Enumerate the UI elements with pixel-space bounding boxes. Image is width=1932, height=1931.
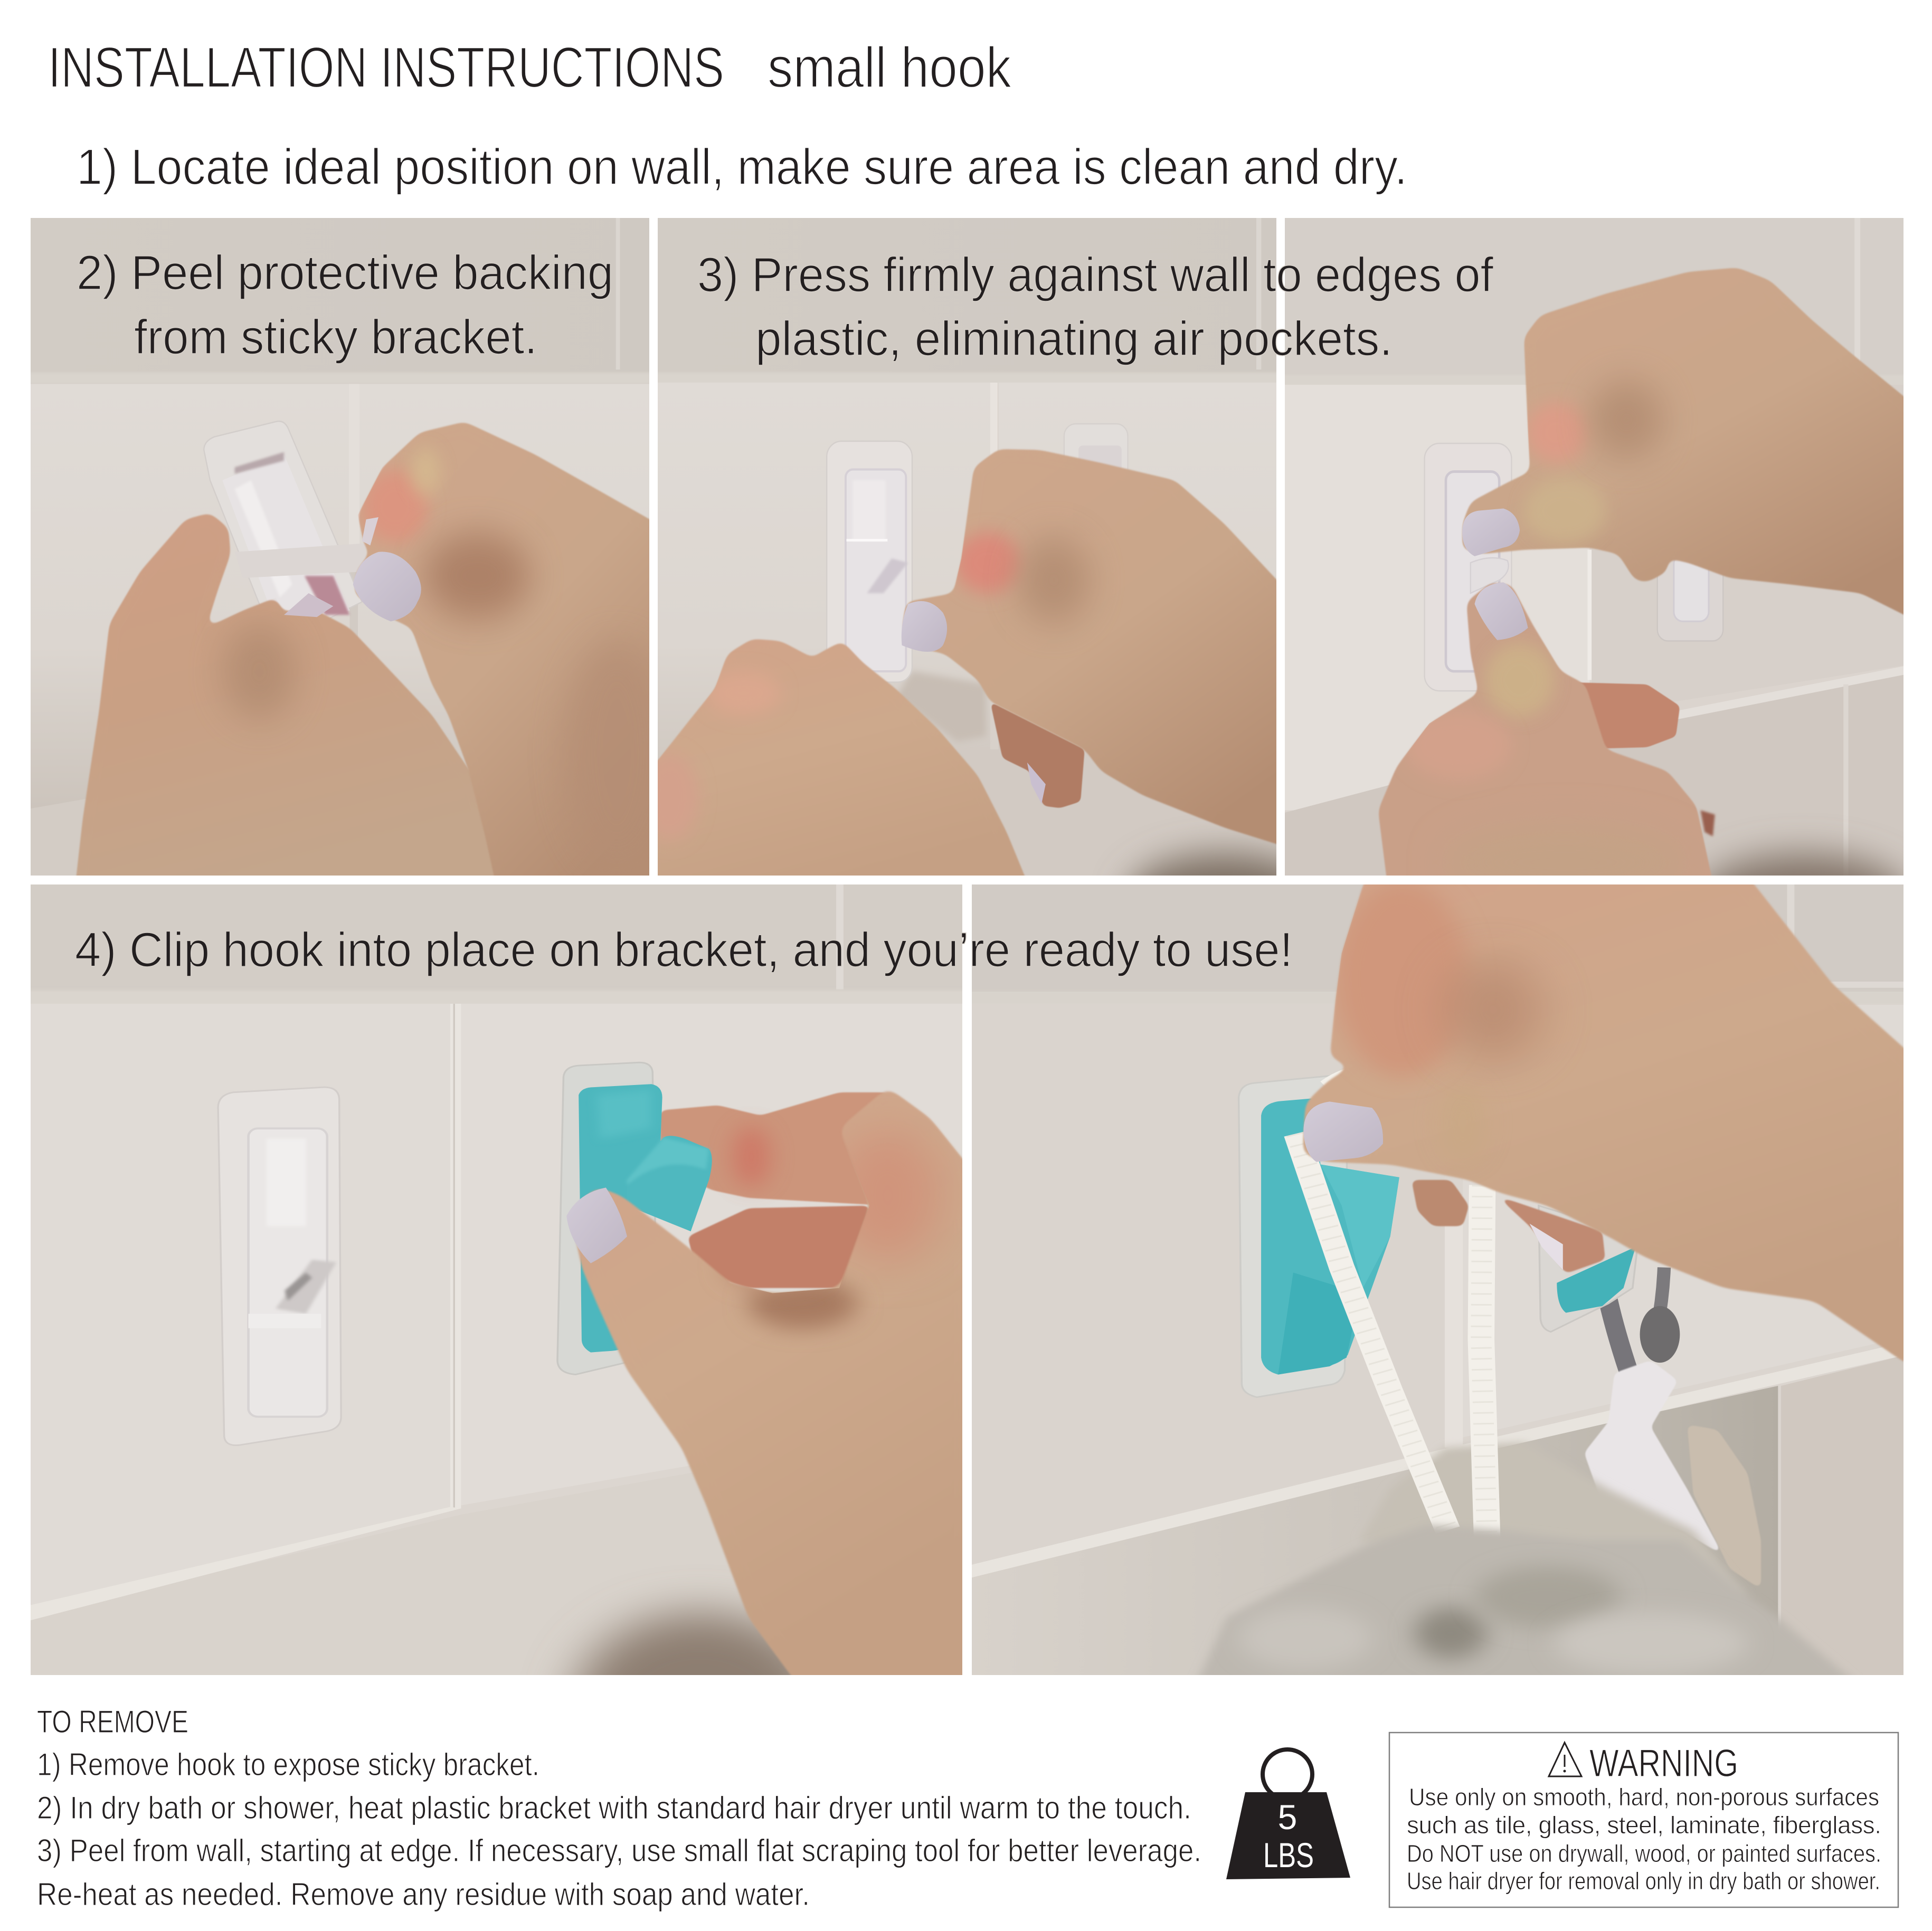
- right hand: [902, 449, 1293, 849]
- step 4 text: 4) Clip hook into place on bracket, and you’re ready to use!: [75, 923, 1293, 977]
- icon: 5 lbs weight: 5: [1278, 1797, 1297, 1837]
- grey cords: [1599, 1254, 1680, 1383]
- fingernail lower: [1474, 582, 1528, 640]
- left hand: [74, 513, 508, 892]
- icon: 5 lbs weight: LBS: [1263, 1835, 1314, 1875]
- step 3 text: plastic, eliminating air pockets.: [755, 312, 1393, 366]
- hand: [1302, 876, 1916, 1371]
- right bracket: [557, 1062, 657, 1375]
- title: small hook: [768, 35, 1011, 100]
- sticky bracket: [1425, 443, 1512, 691]
- step 3 text: [697, 248, 1493, 366]
- loofah: [1196, 1525, 1857, 1683]
- step 1 text: 1) Locate ideal position on wall, make sure area is clean and dry.: [77, 139, 1407, 195]
- removal instructions: 1) Remove hook to expose sticky bracket.: [37, 1747, 539, 1782]
- lower left hand: [641, 639, 1031, 892]
- hand and thumb: [570, 1087, 971, 1683]
- panel: clipping hook photo: [21, 876, 971, 1808]
- icon: 5 lbs weight: [1226, 1749, 1350, 1879]
- second teal hook: [1557, 1247, 1636, 1312]
- pumice stone: [1687, 1424, 1761, 1589]
- white rope: [1296, 1068, 1487, 1540]
- loofah mesh back: [1360, 1442, 1748, 1597]
- second bracket: [1539, 1206, 1639, 1332]
- fingernail: [566, 1187, 627, 1263]
- step 2 text: [77, 246, 613, 364]
- fingernail: [902, 601, 947, 652]
- title: INSTALLATION INSTRUCTIONS: [48, 35, 724, 100]
- bracket film: [203, 421, 363, 617]
- lower hand: [1378, 582, 1715, 901]
- left clear bracket: [218, 1087, 341, 1445]
- icon: warning triangle: [1549, 1743, 1581, 1776]
- step 2 text: 2) Peel protective backing: [77, 246, 613, 300]
- second bracket: [1064, 423, 1129, 468]
- fingers behind hook: [660, 1092, 888, 1288]
- second bracket: [1658, 541, 1723, 641]
- first bracket: [1239, 1076, 1348, 1397]
- removal instructions: TO REMOVE: [37, 1704, 188, 1739]
- removal instructions: 2) In dry bath or shower, heat plastic bracket with standard hair dryer until warm to the touch.: [37, 1790, 1191, 1825]
- lower fingers: [1412, 1180, 1605, 1273]
- fingernail: [1303, 1101, 1383, 1162]
- fingernail top: [1462, 509, 1520, 556]
- teal hook: [1261, 1099, 1399, 1375]
- removal instructions: Re-heat as needed. Remove any residue with soap and water.: [37, 1877, 810, 1912]
- panel: pressing thumbs photo: [1277, 211, 1921, 949]
- warning box: Use only on smooth, hard, non-porous surfaces: [1409, 1783, 1879, 1811]
- panel: peeling backing photo: [21, 211, 670, 892]
- sticky bracket: [827, 441, 912, 682]
- step 3 text: 3) Press firmly against wall to edges of: [697, 248, 1493, 302]
- warning box: [1389, 1733, 1898, 1907]
- lower fingers: [990, 702, 1085, 808]
- lower finger: [1565, 682, 1680, 749]
- panel: pressing bracket photo: [641, 211, 1323, 949]
- brush: [1584, 1360, 1723, 1556]
- teal hook: [579, 1084, 712, 1353]
- step 2 text: from sticky bracket.: [134, 310, 537, 364]
- warning box: WARNING: [1589, 1742, 1738, 1785]
- removal instructions: [37, 1704, 1201, 1912]
- right hand: [354, 422, 670, 892]
- panel: hanging loofah photo: [966, 876, 1916, 1683]
- removal instructions: 3) Peel from wall, starting at edge. If necessary, use small flat scraping tool for better leverage.: [37, 1833, 1201, 1868]
- warning box: such as tile, glass, steel, laminate, fiberglass.: [1407, 1811, 1881, 1839]
- fingernail: [353, 551, 421, 621]
- upper hand: [1462, 268, 1921, 624]
